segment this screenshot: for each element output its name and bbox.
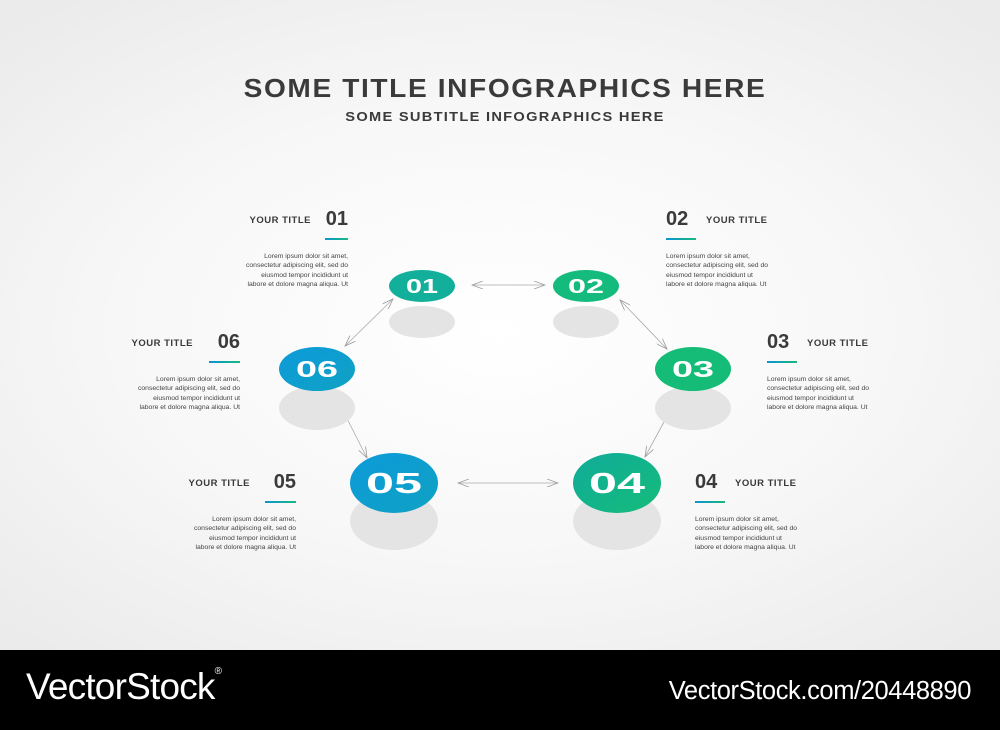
block 01: labore et dolore magna aliqua. Ut xyxy=(247,281,348,288)
block 03: consectetur adipiscing elit, sed do xyxy=(767,385,869,392)
block 04: eiusmod tempor incididunt ut xyxy=(695,535,782,542)
block 06: 06 xyxy=(218,331,240,353)
node 01 xyxy=(389,270,455,302)
block 03: YOUR TITLE xyxy=(807,338,868,349)
block 06 xyxy=(132,331,240,411)
arrows xyxy=(334,285,678,483)
block 01: eiusmod tempor incididunt ut xyxy=(261,272,348,279)
block 03 xyxy=(767,331,869,411)
footer logo: VectorStock® xyxy=(26,666,221,707)
node 03 xyxy=(655,347,731,391)
block 06: eiusmod tempor incididunt ut xyxy=(153,395,240,402)
node 06: 06 xyxy=(296,356,338,382)
block 04: YOUR TITLE xyxy=(735,478,796,489)
block 05: Lorem ipsum dolor sit amet, xyxy=(212,516,296,523)
block 01 xyxy=(246,208,348,288)
block 05: YOUR TITLE xyxy=(189,478,250,489)
underlines xyxy=(209,238,797,503)
node 02 xyxy=(553,270,619,302)
node 04 xyxy=(573,453,661,513)
block 01: consectetur adipiscing elit, sed do xyxy=(246,262,348,269)
node 05: 05 xyxy=(366,468,422,500)
block 05: eiusmod tempor incididunt ut xyxy=(209,535,296,542)
block 04: Lorem ipsum dolor sit amet, xyxy=(695,516,779,523)
node 01: 01 xyxy=(406,276,438,298)
block 01: YOUR TITLE xyxy=(250,215,311,226)
footer url: VectorStock.com/20448890 xyxy=(669,677,971,705)
block 05: 05 xyxy=(274,471,296,493)
block 03: eiusmod tempor incididunt ut xyxy=(767,395,854,402)
shadows xyxy=(279,306,731,550)
block 02: consectetur adipiscing elit, sed do xyxy=(666,262,768,269)
footer bar xyxy=(0,650,1000,730)
node 04: 04 xyxy=(589,468,645,500)
title: SOME TITLE INFOGRAPHICS HERE xyxy=(244,73,766,103)
block 04: 04 xyxy=(695,471,717,493)
block 03: 03 xyxy=(767,331,789,353)
block 02: Lorem ipsum dolor sit amet, xyxy=(666,253,750,260)
block 03: labore et dolore magna aliqua. Ut xyxy=(767,404,868,411)
block 02: labore et dolore magna aliqua. Ut xyxy=(666,281,767,288)
block 06: labore et dolore magna aliqua. Ut xyxy=(139,404,240,411)
block 02: eiusmod tempor incididunt ut xyxy=(666,272,753,279)
block 02: YOUR TITLE xyxy=(706,215,767,226)
block 06: consectetur adipiscing elit, sed do xyxy=(138,385,240,392)
node 02: 02 xyxy=(568,276,604,298)
block 05: labore et dolore magna aliqua. Ut xyxy=(195,544,296,551)
block 04: consectetur adipiscing elit, sed do xyxy=(695,525,797,532)
block 02 xyxy=(666,208,768,288)
subtitle: SOME SUBTITLE INFOGRAPHICS HERE xyxy=(345,110,665,124)
block 05 xyxy=(188,471,296,551)
block 04: labore et dolore magna aliqua. Ut xyxy=(695,544,796,551)
block 01: 01 xyxy=(326,208,348,230)
block 04 xyxy=(695,471,797,551)
block 02: 02 xyxy=(666,208,688,230)
block 01: Lorem ipsum dolor sit amet, xyxy=(264,253,348,260)
block 06: Lorem ipsum dolor sit amet, xyxy=(156,376,240,383)
node 06 xyxy=(279,347,355,391)
block 03: Lorem ipsum dolor sit amet, xyxy=(767,376,851,383)
node 03: 03 xyxy=(672,356,714,382)
node 05 xyxy=(350,453,438,513)
block 05: consectetur adipiscing elit, sed do xyxy=(194,525,296,532)
block 06: YOUR TITLE xyxy=(132,338,193,349)
